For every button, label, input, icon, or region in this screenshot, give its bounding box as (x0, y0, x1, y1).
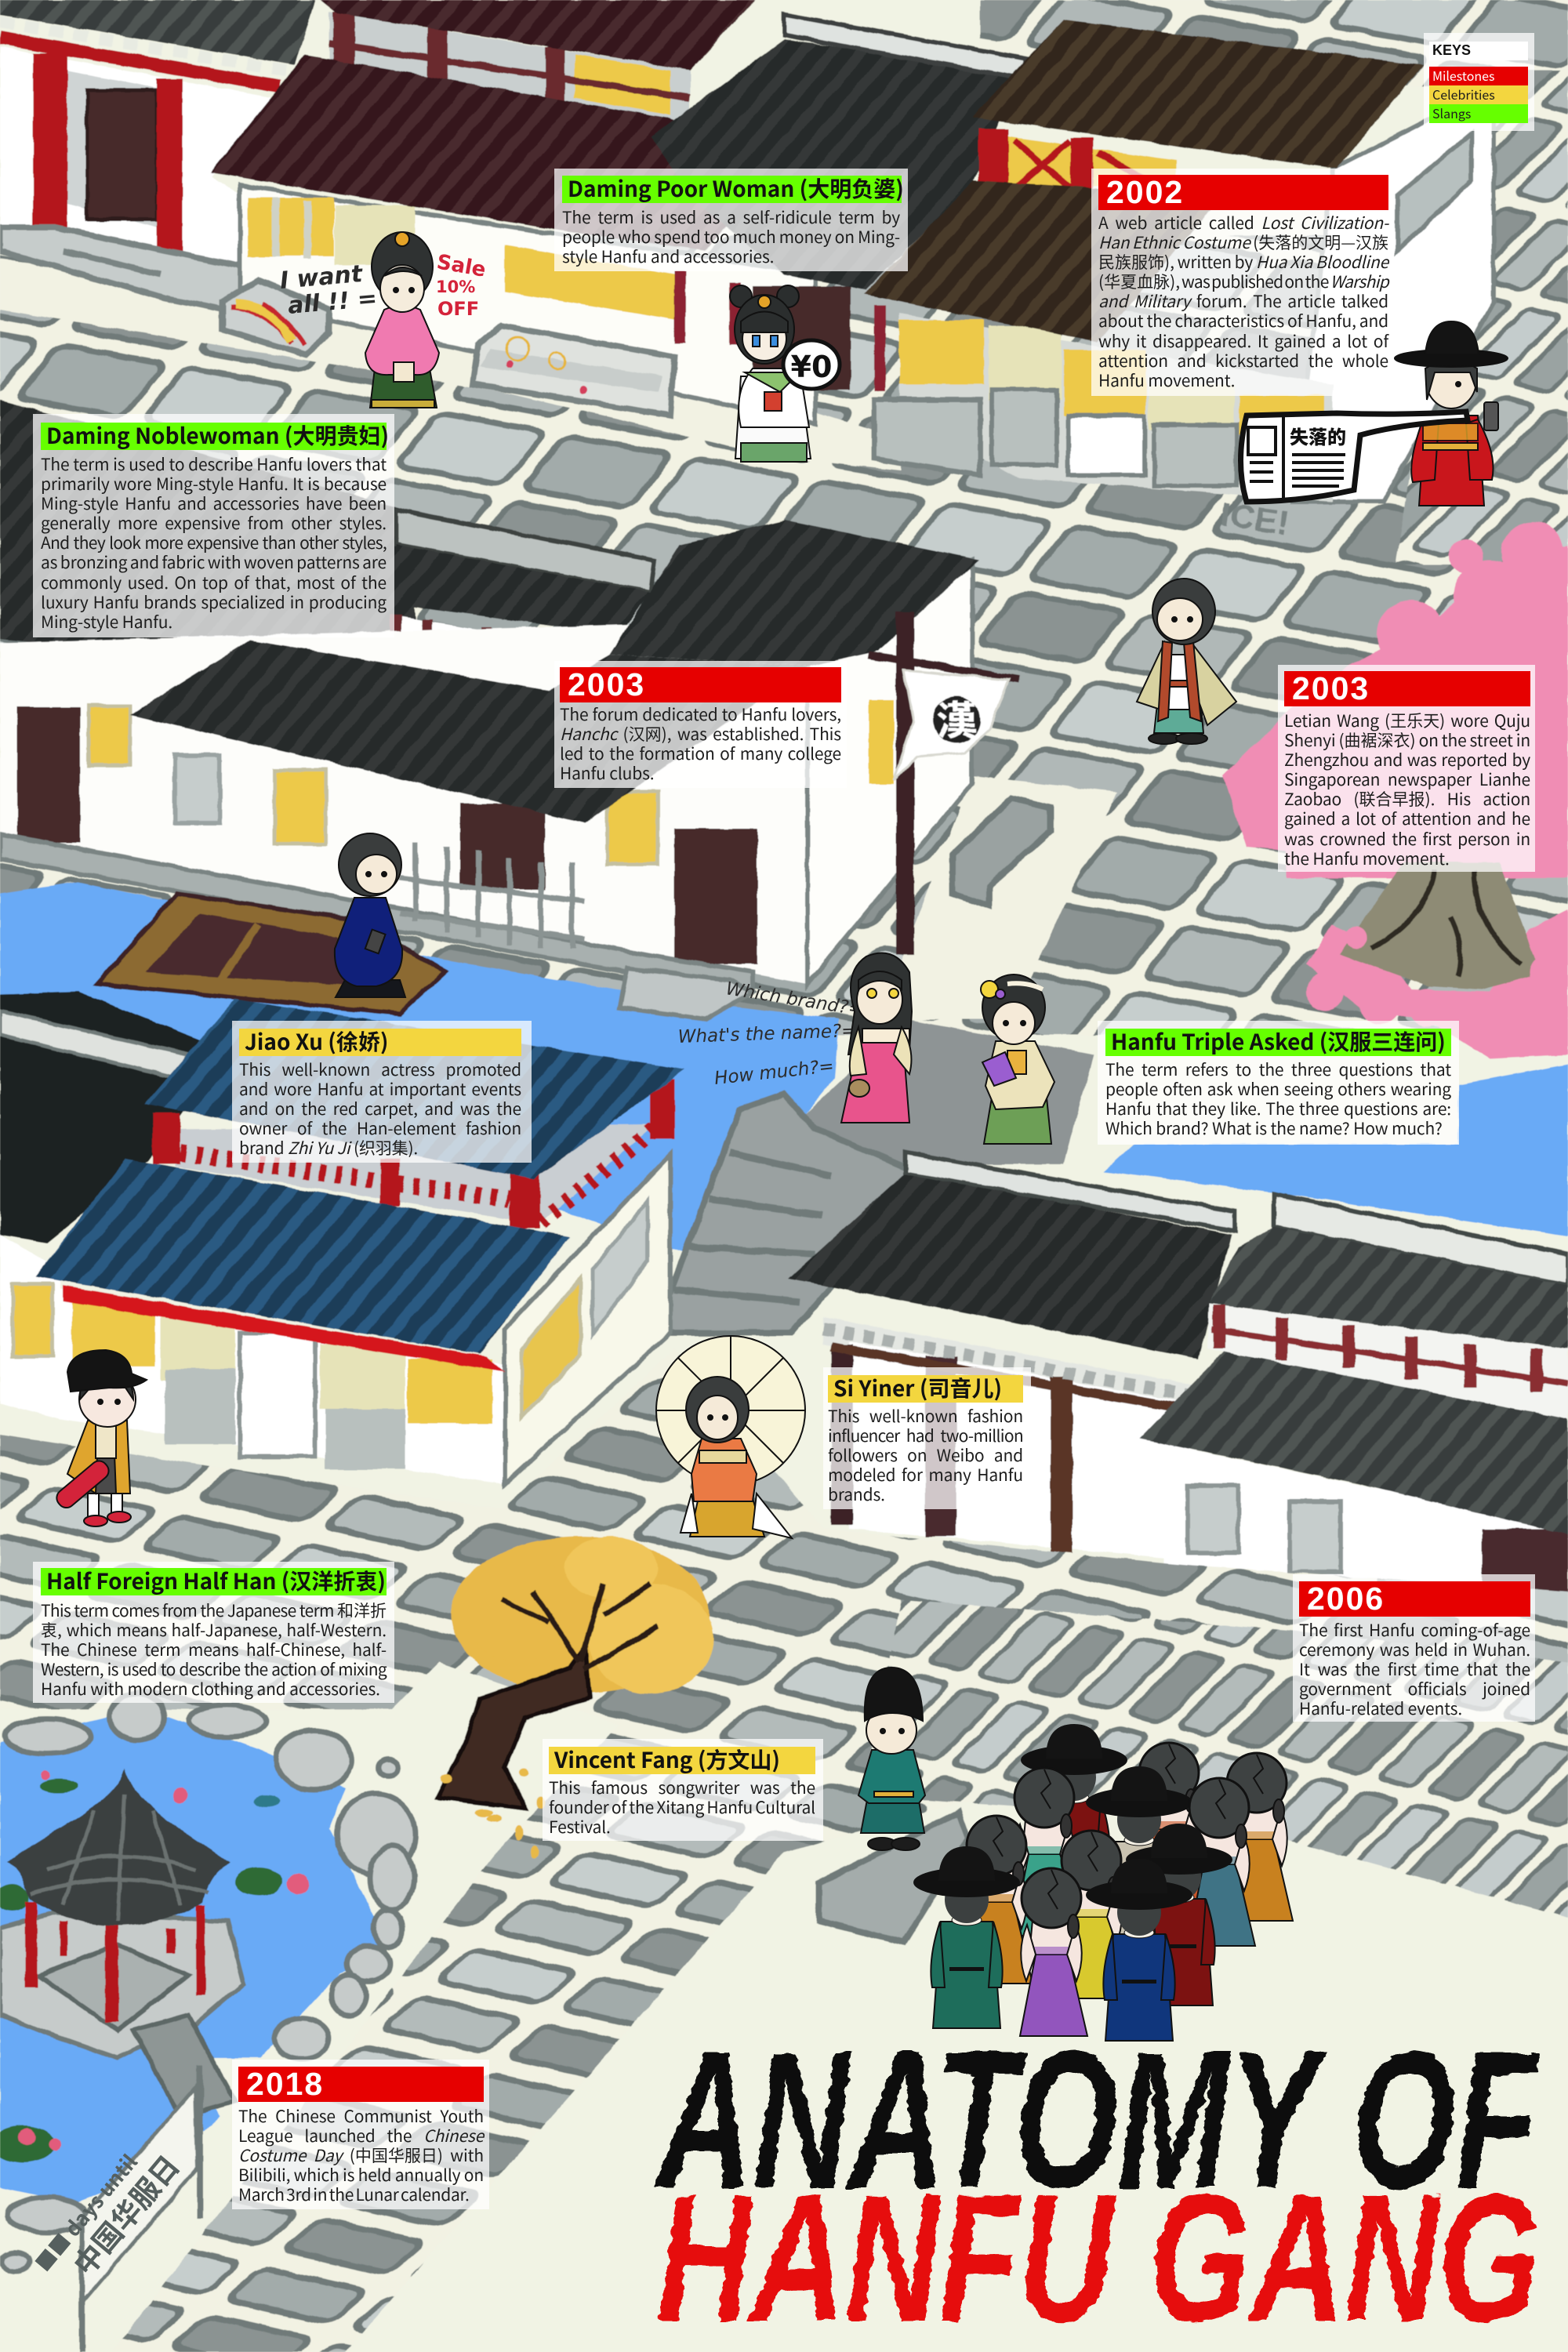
panel: Hanfu Triple Asked (1098, 1021, 1459, 1145)
body text: This well-known actress promoted (239, 1058, 521, 1081)
body text: as bronzing and fabric with woven patterns are (41, 550, 387, 574)
water: canal (0, 882, 1568, 1254)
year heading (238, 2067, 484, 2102)
body text (1284, 709, 1530, 870)
body text: Hanchc was established. This (560, 722, 841, 746)
stairs (655, 1094, 925, 1333)
body text (41, 452, 387, 633)
paving stones: upper streets (0, 235, 1568, 1035)
building: left black roof (0, 400, 416, 659)
body text: Han Ethnic Costume (1098, 230, 1250, 254)
body text: Shenyi on the street in (1284, 728, 1530, 752)
sign board text: 中国华服日 (62, 2145, 187, 2283)
flag pole and banner (869, 612, 1019, 954)
handwritten sign: sale: 10% (436, 278, 475, 296)
paving stones: right side street (1396, 71, 1568, 564)
flag pole and banner: 漢 (936, 688, 977, 747)
bridge deck (784, 1019, 1094, 1164)
handwritten sign: sale: Sale (435, 250, 488, 282)
character: Jiao Xu in navy (335, 833, 405, 997)
heading (239, 1029, 521, 1056)
body text: Zaobao His action (1284, 787, 1530, 811)
body text (1105, 1058, 1451, 1140)
legend: slangs (1429, 104, 1528, 123)
handwritten questions (677, 978, 865, 1089)
handwritten questions: What's the name?= (677, 1021, 857, 1047)
body text: attention and kickstarted the whole (1098, 349, 1388, 372)
sign board: Chinese Costume Day (82, 2066, 200, 2352)
body text: which means half-Japanese, half-Western. (67, 1618, 387, 1642)
body text: the Hanfu movement. (1284, 847, 1450, 870)
heading: Hanfu Triple Asked (汉服三连问) (1111, 1025, 1446, 1057)
paving stones: top street (980, 0, 1568, 86)
body text: (联合早报). (1353, 787, 1435, 811)
icon: newspaper bubble (1240, 412, 1468, 502)
body text: written by Hua Xia Bloodline (1178, 250, 1388, 274)
body text: Hanfu clubs. (560, 761, 654, 785)
body text: League launched the Chinese (238, 2124, 484, 2147)
body text: (王乐天) (1385, 709, 1445, 732)
body text: luxury Hanfu brands specialized in producing (41, 590, 387, 614)
paving stones: lower town and diagonal street (0, 1348, 1568, 2352)
body text (238, 2104, 485, 2206)
panel: Si Yiner (823, 1367, 1031, 1509)
body text: people who spend too much money on Ming- (562, 225, 900, 249)
handwritten questions: Which brand?= (724, 978, 865, 1021)
legend: milestones (1429, 67, 1528, 85)
body text: Hanfu with modern clothing and accessories. (41, 1677, 380, 1700)
body text: style Hanfu and accessories. (562, 245, 774, 268)
paving stones: long rows in the lower right (862, 1599, 1568, 1918)
body text (560, 702, 841, 785)
shop sign on the ground: ICE! (1218, 495, 1292, 543)
ground: pale area by the white house (878, 776, 1117, 1019)
icon: newspaper bubble: 失落的 (1290, 422, 1346, 449)
legend: celebrities (1429, 85, 1528, 104)
body text: Singaporean newspaper Lianhe (1284, 768, 1530, 791)
body text: was published on the Warship (1181, 270, 1388, 293)
panel: 2002 milestone (1091, 169, 1394, 396)
body text: 衷, (41, 1618, 62, 1642)
body text: and on the red carpet, and was the (239, 1097, 521, 1120)
legend title: KEYS (1432, 42, 1471, 58)
body text: (中国华服日) (350, 2143, 443, 2167)
sign board text (28, 2129, 187, 2301)
body text: 民族服饰), (1098, 250, 1174, 274)
legend: slangs: Slangs (1432, 103, 1471, 122)
body text: generally more expensive from other styles. (41, 511, 387, 535)
body text: Ming-style Hanfu and accessories have been (41, 492, 387, 515)
panel: keys legend (1424, 33, 1534, 131)
body text (1098, 211, 1389, 392)
building: blue roof house (35, 999, 685, 1484)
heading: Daming Poor Woman (大明负婆) (568, 172, 904, 204)
body text: brand Zhi Yu Ji (织羽集). (239, 1136, 418, 1160)
panel: Half Foreign Half Han (33, 1562, 394, 1703)
building: top left hall (0, 0, 315, 314)
panel: 2003 forum milestone (554, 661, 847, 788)
body text: Bilibili, which is held annually on (238, 2163, 484, 2187)
body text (239, 1058, 521, 1160)
handwritten sign: sale (435, 250, 488, 320)
body text: The term is used to describe Hanfu lovers that (41, 452, 387, 476)
year heading (560, 667, 841, 702)
body text: Hanfu movement. (1098, 368, 1235, 392)
body text: The Chinese Communist Youth (238, 2104, 484, 2128)
body text: influencer had two-million (828, 1424, 1023, 1447)
body text: The Chinese term means half-Chinese, half- (41, 1638, 387, 1661)
stepping block (819, 1813, 968, 1943)
body text: This famous songwriter was the (549, 1776, 815, 1799)
crowd: hat figure back row (1021, 1724, 1127, 1906)
display goods: fabric box (223, 280, 329, 354)
year heading (1284, 671, 1530, 706)
body text: This term comes from the Japanese term (41, 1599, 334, 1622)
handwritten note: I want all (279, 260, 378, 320)
heading: Daming Noblewoman (大明贵妇) (46, 419, 389, 451)
body text: about the characteristics of Hanfu, and (1098, 309, 1388, 332)
body text: gained a lot of attention and he (1284, 807, 1530, 830)
ground: pale strip along shop fronts (0, 259, 902, 470)
body text: (汉网), (623, 722, 672, 746)
speech bubble: zero yuan (783, 340, 840, 389)
building: brown roof shop (864, 20, 1424, 502)
body text: Festival. (549, 1815, 611, 1838)
character: girl with purple fan (981, 975, 1054, 1144)
panel: Daming Poor Woman (554, 169, 908, 271)
body text: The term is used as a self-ridicule term by (562, 205, 900, 229)
pond (0, 1693, 416, 2271)
body text: and Military forum. The article talked (1098, 289, 1388, 313)
character: boy in striped robe (1137, 579, 1236, 744)
body text: Hanfu that they like. The three questions are: (1105, 1097, 1451, 1120)
legend: celebrities: Celebrities (1432, 85, 1495, 103)
panel: 2018 milestone (232, 2060, 489, 2209)
body text: 和洋折 (337, 1599, 387, 1622)
heading: Jiao Xu (徐娇) (245, 1025, 388, 1057)
building: mid black roofs (130, 520, 979, 823)
heading: Half Foreign Half Han (汉洋折衷) (46, 1565, 386, 1596)
body text: Costume Day with (238, 2143, 484, 2167)
body text: This well-known fashion (828, 1404, 1023, 1428)
legend: milestones: Milestones (1432, 66, 1495, 85)
panel: 2006 milestone (1293, 1574, 1535, 1722)
body text: founder of the Xitang Hanfu Cultural (549, 1795, 815, 1819)
cherry tree (1223, 521, 1568, 1058)
building: mid pale ridge and windows (392, 510, 655, 682)
character: hat man in red with phone (1395, 321, 1508, 506)
body text: (曲裾深衣) (1338, 728, 1416, 752)
heading: Si Yiner (司音儿) (833, 1372, 1002, 1403)
body text: was crowned the first person in (1284, 827, 1530, 851)
body text: owner of the Han-element fashion (239, 1116, 521, 1140)
crowd of students seen from behind (913, 1724, 1293, 2041)
body text: Which brand? What is the name? How much? (1105, 1116, 1443, 1140)
body text: Zhengzhou and was reported by (1284, 748, 1530, 771)
bench (953, 798, 1051, 906)
pavilion (0, 1768, 243, 2058)
handwritten sign: sale: OFF (437, 298, 479, 320)
body text: (华夏血脉), (1098, 270, 1180, 293)
body text: The term refers to the three questions that (1105, 1058, 1451, 1081)
fence (400, 843, 585, 949)
body text: brands. (828, 1483, 885, 1506)
ginkgo tree (437, 1537, 713, 1858)
building: upper maroon shop (320, 0, 755, 129)
body text: primarily wore Ming-style Hanfu. It is because (41, 472, 387, 495)
body text: Letian Wang wore Quju (1284, 709, 1530, 732)
body text: commonly used. On top of that, most of the (41, 571, 387, 594)
panel: Jiao Xu (232, 1021, 532, 1163)
body text: people often ask when seeing others wearing (1105, 1077, 1451, 1101)
body text (1299, 1618, 1530, 1720)
handwritten note: I want all: I want (279, 260, 365, 295)
body text: (失落的文明—汉族 (1253, 230, 1388, 254)
building: white house wall (0, 560, 972, 989)
display goods: jewelry table (473, 325, 674, 416)
character: girl in pink skirt (841, 953, 912, 1123)
character: white robed girl (730, 285, 811, 462)
building: black roof with ridge (651, 14, 1027, 290)
year heading (1299, 1581, 1530, 1617)
body text: March 3rd in the Lunar calendar. (238, 2183, 470, 2206)
character: umbrella woman (656, 1336, 805, 1538)
water steps (619, 968, 753, 1019)
body text: led to the formation of many college (560, 742, 841, 765)
body text: followers on Weibo and (828, 1443, 1023, 1467)
body text (562, 205, 900, 268)
speech bubble: zero yuan: ¥0 (791, 350, 832, 384)
body text: Hanfu-related events. (1299, 1697, 1462, 1720)
body text (828, 1404, 1023, 1506)
year heading: 2006 (1307, 1581, 1385, 1617)
handwritten questions: How much?= (713, 1056, 835, 1089)
year heading: 2003 (1292, 670, 1370, 706)
sign board text: ■■ days until (28, 2147, 143, 2277)
body text: why it disappeared. It gained a lot of (1098, 329, 1388, 353)
year heading (1098, 175, 1388, 210)
body text: The forum dedicated to Hanfu lovers, (560, 702, 841, 726)
body text: government officials joined (1299, 1677, 1530, 1700)
heading: Vincent Fang (方文山) (554, 1744, 780, 1775)
building: left black roof near canal (0, 992, 227, 1243)
wooden walkway (133, 2015, 235, 2117)
character: Vincent Fang in green robe (858, 1668, 925, 1850)
body text: ceremony was held in Wuhan. (1299, 1638, 1530, 1661)
body text: Ming-style Hanfu. (41, 610, 172, 633)
title: Anatomy of Hanfu Gang (654, 2010, 1540, 2352)
panel: 2003 Letian Wang milestone (1278, 665, 1535, 872)
body text (549, 1776, 815, 1838)
legend title (1429, 42, 1528, 60)
body text: Western, is used to describe the action of mixing (41, 1657, 387, 1681)
boat (97, 894, 445, 1014)
character: pink jacket shopper (365, 232, 439, 408)
building: lower right black roofs (789, 1152, 1568, 1599)
body text: and wore Hanfu at important events (239, 1077, 521, 1101)
body text: It was the first time that the (1299, 1657, 1530, 1681)
character: skater (53, 1350, 147, 1526)
body text: And they look more expensive than other styles, (41, 531, 387, 554)
building: right white wall (1294, 86, 1494, 502)
year heading: 2018 (246, 2066, 324, 2102)
building: pale shop wall (240, 185, 885, 423)
body text: A web article called Lost Civilization- (1098, 211, 1388, 234)
panel: Daming Noblewoman (33, 414, 394, 637)
body text (41, 1599, 387, 1700)
body text: The first Hanfu coming-of-age (1299, 1618, 1530, 1642)
building: left wall under dark roof (0, 1234, 60, 1419)
panel: Vincent Fang (543, 1739, 823, 1841)
body text: modeled for many Hanfu (828, 1463, 1023, 1486)
building: maroon roof (210, 55, 784, 251)
year heading: 2003 (568, 666, 645, 702)
handwritten note: I want all: all !! = (287, 285, 378, 320)
year heading: 2002 (1106, 174, 1184, 210)
